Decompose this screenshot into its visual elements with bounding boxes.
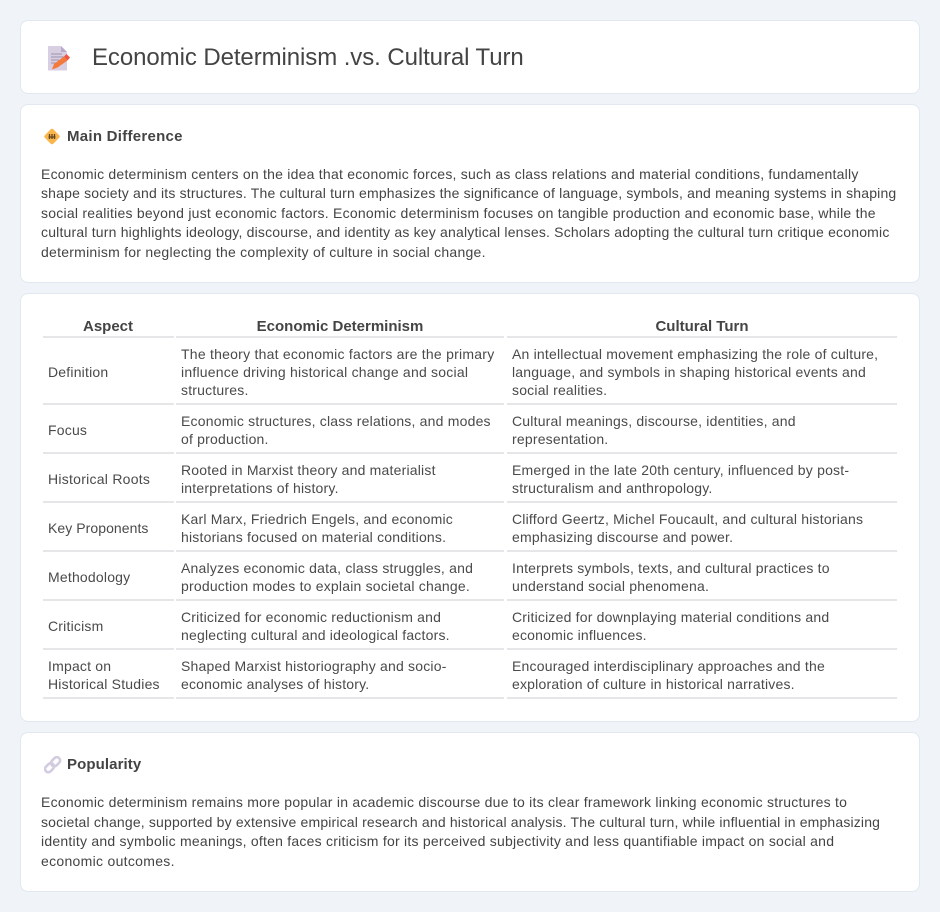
row: methodology xyxy=(48,560,830,594)
text block: main difference: shape society and its structures. The cultural turn emphasizes the significance of language, symbols, and meaning systems in shaping xyxy=(41,185,896,201)
row: definition: language, and symbols in shaping historical events and xyxy=(512,364,866,380)
text block: main difference: cultural turn highlights ideology, discourse, and identity as key analytical lenses. Scholars adopting the cultural turn critique economic xyxy=(41,224,890,240)
text block: popularity: economic outcomes. xyxy=(41,853,175,869)
table header: aspect: Aspect xyxy=(83,318,133,335)
row: key proponents: emphasizing discourse and power. xyxy=(512,529,733,545)
row: focus: representation. xyxy=(512,431,608,447)
row: historical roots: Emerged in the late 20th century, influenced by post- xyxy=(512,462,849,478)
row: historical roots: Historical Roots xyxy=(48,471,150,487)
row: impact on historical studies: Shaped Marxist historiography and socio- xyxy=(181,658,447,674)
row: historical roots: structuralism and anthropology. xyxy=(512,480,712,496)
icon: diamond sign xyxy=(44,128,60,144)
row: methodology: Interprets symbols, texts, and cultural practices to xyxy=(512,560,830,576)
panel: main difference xyxy=(20,104,920,283)
row: criticism xyxy=(48,609,829,643)
row: historical roots xyxy=(48,462,849,496)
heading: main difference: Main Difference xyxy=(67,128,183,145)
table header: economic determinism: Economic Determinism xyxy=(257,318,423,335)
heading: popularity: Popularity xyxy=(67,756,141,773)
row: methodology: production modes to explain societal change. xyxy=(181,578,470,594)
text block: main difference: determinism for neglecting the complexity of culture in social change. xyxy=(41,244,486,260)
panel: popularity xyxy=(20,732,920,892)
row: historical roots: Rooted in Marxist theory and materialist xyxy=(181,462,436,478)
row: impact on historical studies: Encouraged interdisciplinary approaches and the xyxy=(512,658,825,674)
row: methodology: understand social phenomena. xyxy=(512,578,709,594)
title: Economic Determinism .vs. Cultural Turn xyxy=(92,44,524,71)
row: definition: social realities. xyxy=(512,382,607,398)
text block: main difference xyxy=(41,166,896,260)
row: definition: influence driving historical change and social xyxy=(181,364,468,380)
panel: title card xyxy=(20,20,920,94)
row: focus: Focus xyxy=(48,422,87,438)
row: impact on historical studies: economic analyses of history. xyxy=(181,676,369,692)
row: definition: structures. xyxy=(181,382,249,398)
row: criticism: Criticism xyxy=(48,618,103,634)
row: methodology: Analyzes economic data, class struggles, and xyxy=(181,560,473,576)
text block: popularity: societal change, supported by extensive empirical research and historical analysis. The cultural turn, while influential in emphasizing xyxy=(41,814,880,830)
icon: document with pencil xyxy=(48,46,70,70)
row: key proponents: Key Proponents xyxy=(48,520,148,536)
row: historical roots: interpretations of history. xyxy=(181,480,339,496)
text block: main difference: Economic determinism centers on the idea that economic forces, such as class relations and material conditions, fundamentally xyxy=(41,166,859,182)
row: impact on historical studies: Historical Studies xyxy=(48,676,160,692)
text block: popularity xyxy=(41,794,880,869)
row: focus: Cultural meanings, discourse, identities, and xyxy=(512,413,796,429)
row: definition: The theory that economic factors are the primary xyxy=(181,346,494,362)
text block: main difference: social realities beyond just economic factors. Economic determinism focuses on tangible production and economic base, while the xyxy=(41,205,876,221)
row: impact on historical studies xyxy=(48,658,825,692)
row: methodology: Methodology xyxy=(48,569,130,585)
row: impact on historical studies: exploration of culture in historical narratives. xyxy=(512,676,795,692)
row: key proponents: Karl Marx, Friedrich Engels, and economic xyxy=(181,511,453,527)
panel: comparison table xyxy=(20,293,920,722)
row: criticism: Criticized for economic reductionism and xyxy=(181,609,441,625)
table header: cultural turn: Cultural Turn xyxy=(655,318,749,335)
row: focus: Economic structures, class relations, and modes xyxy=(181,413,491,429)
row: criticism: Criticized for downplaying material conditions and xyxy=(512,609,829,625)
text block: popularity: Economic determinism remains more popular in academic discourse due to its clear framework linking economic structures to xyxy=(41,794,847,810)
row: focus: of production. xyxy=(181,431,269,447)
row: key proponents xyxy=(48,511,863,545)
row: focus xyxy=(48,413,796,447)
row: definition: Definition xyxy=(48,364,108,380)
row: key proponents: Clifford Geertz, Michel Foucault, and cultural historians xyxy=(512,511,863,527)
row: impact on historical studies: Impact on xyxy=(48,658,111,674)
row: criticism: neglecting cultural and ideological factors. xyxy=(181,627,450,643)
row: definition: An intellectual movement emphasizing the role of culture, xyxy=(512,346,878,362)
row: key proponents: historians focused on material conditions. xyxy=(181,529,446,545)
row: definition xyxy=(48,346,878,398)
text block: popularity: identity and symbolic meanings, often faces criticism for its perceived subjectivity and less quantifiable impact on social and xyxy=(41,833,834,849)
row: criticism: economic influences. xyxy=(512,627,647,643)
icon: chain link xyxy=(44,756,62,774)
